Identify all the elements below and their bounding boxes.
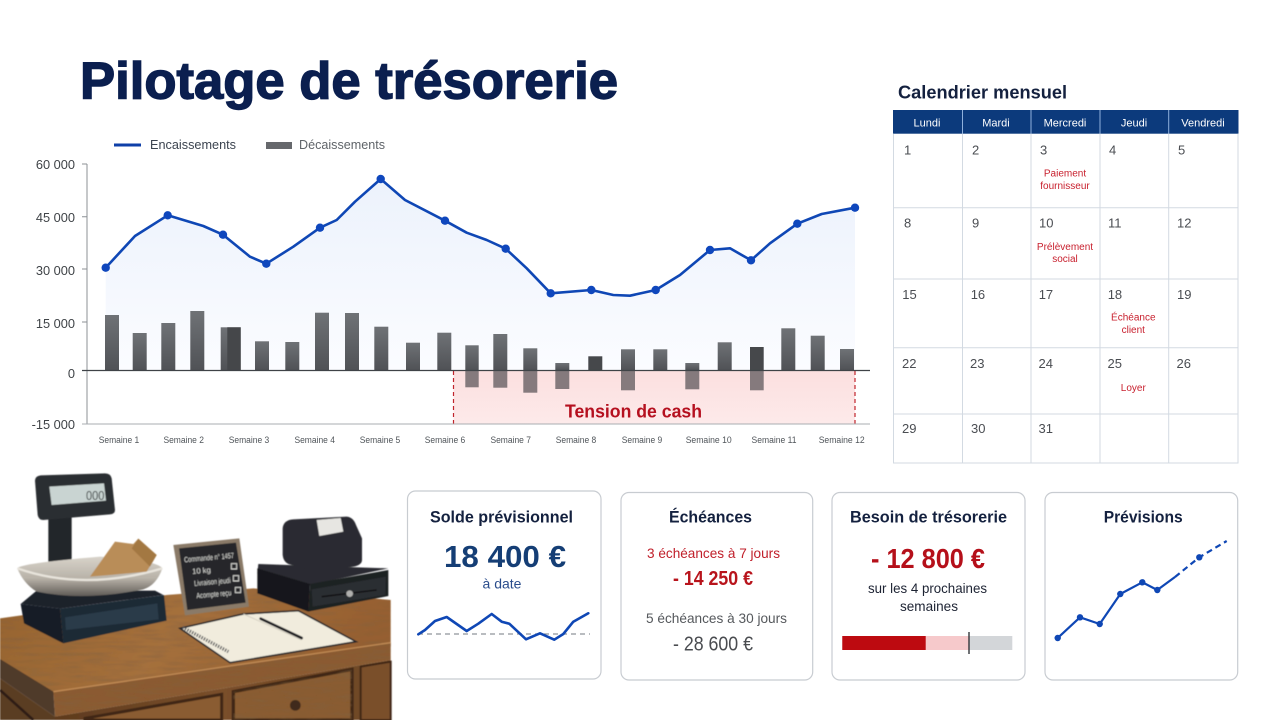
calendar day numbers: 5 <box>1178 142 1185 157</box>
x axis week labels: Semaine 12 <box>819 435 865 445</box>
x axis week labels: Semaine 8 <box>556 435 596 445</box>
calendar events: social <box>1052 254 1078 265</box>
y axis: 15 000 <box>36 316 75 331</box>
panel: prévisions <box>1045 492 1238 680</box>
x axis week labels: Semaine 11 <box>752 435 796 445</box>
card heading: Solde prévisionnel <box>430 508 573 527</box>
y axis: 60 000 <box>36 157 75 172</box>
illustration: shop counter with scale, order slate, notebook and cash drawer <box>0 473 391 720</box>
panel: échéances <box>621 492 813 680</box>
calendar day numbers: 2 <box>972 142 979 157</box>
chart: encaissements et décaissements <box>32 137 870 445</box>
panel: monthly calendar <box>893 82 1238 463</box>
calendar events: Paiement <box>1044 169 1086 180</box>
receipt printer and cash drawer <box>257 517 388 612</box>
cash tension label: Tension de cash <box>565 400 702 422</box>
7 day label: 3 échéances à 7 jours <box>647 545 780 561</box>
calendar header row: Mercredi <box>1044 118 1086 130</box>
calendar day numbers: 8 <box>904 216 911 231</box>
calendar day numbers: 11 <box>1108 216 1122 231</box>
30 day amount: - 28 600 € <box>673 634 753 656</box>
calendar header row: Lundi <box>914 118 940 130</box>
x axis week labels: Semaine 6 <box>425 435 465 445</box>
x axis week labels: Semaine 10 <box>686 435 732 445</box>
order slate: Commande n° 1457 <box>184 551 234 564</box>
x axis week labels: Semaine 1 <box>99 435 139 445</box>
calendar day numbers: 26 <box>1176 356 1191 371</box>
progress bar <box>842 632 1012 654</box>
calendar day numbers: 22 <box>902 356 916 371</box>
cash tension zone <box>454 371 855 424</box>
calendar day numbers: 18 <box>1108 287 1122 302</box>
calendar day numbers: 23 <box>970 356 984 371</box>
calendar day numbers: 19 <box>1177 287 1191 302</box>
wooden counter <box>0 588 391 720</box>
chart legend: Encaissements <box>150 137 236 152</box>
panel: besoin de trésorerie <box>832 492 1025 680</box>
caption: sur les 4 prochaines <box>868 580 987 596</box>
calendar day numbers: 25 <box>1108 356 1122 371</box>
card heading: Besoin de trésorerie <box>850 508 1007 527</box>
calendar day numbers: 9 <box>972 216 979 231</box>
forecast line chart <box>1054 541 1227 641</box>
title: Pilotage de trésorerie <box>80 52 618 110</box>
calendar events: fournisseur <box>1040 181 1090 192</box>
chart legend: Décaissements <box>299 137 385 152</box>
y axis: 0 <box>68 366 75 381</box>
7 day amount: - 14 250 € <box>673 568 753 590</box>
y axis: 45 000 <box>36 210 75 225</box>
encaissements line <box>102 175 859 297</box>
chart legend <box>114 137 385 152</box>
calendar events: Loyer <box>1121 383 1146 394</box>
y axis <box>32 157 87 432</box>
card heading: Échéances <box>669 508 752 527</box>
calendar day numbers: 4 <box>1109 142 1116 157</box>
bars: décaissements <box>105 311 854 370</box>
weighing scale: 000 <box>86 489 104 503</box>
calendar day numbers: 12 <box>1177 216 1191 231</box>
area under encaissements line <box>106 179 855 370</box>
caption: à date <box>483 576 522 592</box>
key figure: 18 400 € <box>444 539 566 574</box>
calendar day numbers: 16 <box>971 287 985 302</box>
calendar events <box>1037 169 1156 394</box>
calendar day numbers <box>902 142 1191 436</box>
calendar day numbers: 10 <box>1039 216 1053 231</box>
bars: negative values <box>465 371 764 393</box>
zero and bottom axis lines <box>82 370 870 424</box>
weighing scale <box>17 473 167 643</box>
x axis week labels: Semaine 9 <box>622 435 662 445</box>
calendar day numbers: 3 <box>1040 142 1047 157</box>
x axis week labels <box>99 435 865 445</box>
order slate <box>173 538 249 615</box>
x axis week labels: Semaine 3 <box>229 435 269 445</box>
calendar day numbers: 31 <box>1038 421 1053 436</box>
calendar events: Échéance <box>1111 311 1156 324</box>
caption: semaines <box>900 598 958 614</box>
caption <box>868 580 987 614</box>
calendar header row <box>893 110 1238 134</box>
card heading: Prévisions <box>1104 508 1183 527</box>
open notebook and pen <box>180 611 356 663</box>
sparkline <box>418 613 590 640</box>
calendar events: Prélèvement <box>1037 242 1093 253</box>
y axis: -15 000 <box>32 417 75 432</box>
x axis week labels: Semaine 4 <box>294 435 335 445</box>
y axis: 30 000 <box>36 263 75 278</box>
key figure: - 12 800 € <box>871 543 985 574</box>
order slate: Livraison jeudi <box>194 576 231 588</box>
calendar events: client <box>1122 325 1145 336</box>
order slate: Acompte reçu <box>196 588 232 600</box>
calendar day numbers: 17 <box>1039 287 1053 302</box>
x axis week labels: Semaine 2 <box>163 435 204 445</box>
calendar day numbers: 30 <box>971 421 985 436</box>
x axis week labels: Semaine 7 <box>490 435 531 445</box>
calendar header row: Vendredi <box>1181 118 1225 130</box>
calendar header row: Mardi <box>982 118 1010 130</box>
order slate: 10 kg <box>192 565 211 576</box>
x axis week labels: Semaine 5 <box>360 435 400 445</box>
calendar header row: Jeudi <box>1121 118 1147 130</box>
calendar day numbers: 24 <box>1038 356 1053 371</box>
30 day label: 5 échéances à 30 jours <box>646 610 787 626</box>
calendar heading: Calendrier mensuel <box>898 82 1067 102</box>
calendar day numbers: 1 <box>904 142 911 157</box>
calendar day numbers: 15 <box>902 287 917 302</box>
calendar day numbers: 29 <box>902 421 916 436</box>
panel: solde prévisionnel <box>408 491 601 679</box>
calendar grid <box>893 134 1238 463</box>
